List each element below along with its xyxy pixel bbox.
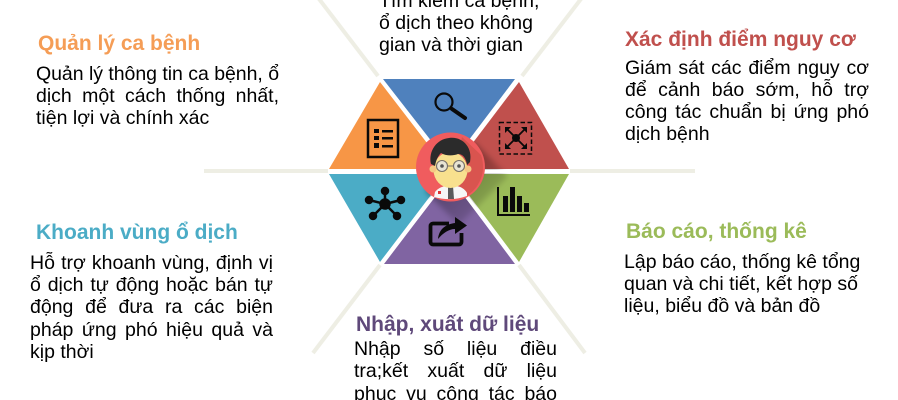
panel: Quản lý ca bệnh: tiện lợi và chính xác	[36, 107, 209, 129]
panel: Xác định điểm nguy cơ: Giám sát các điểm nguy cơ	[625, 57, 869, 79]
panel: Tìm kiếm	[379, 0, 539, 56]
icon: checklist	[368, 120, 398, 157]
panel: Khoanh vùng ổ dịch: ổ dịch tự động hoặc bán tự	[30, 274, 273, 296]
segment: teal	[329, 174, 447, 262]
panel: Tìm kiếm: gian và thời gian	[379, 34, 523, 56]
panel: Xác định điểm nguy cơ: để cảnh báo sớm, hỗ trợ	[625, 79, 869, 101]
panel: Khoanh vùng ổ dịch: Khoanh vùng ổ dịch	[36, 221, 238, 244]
panel: Xác định điểm nguy cơ: dịch bệnh	[625, 123, 710, 145]
panel: Nhập, xuất dữ liệu: tra;kết xuất dữ liệu	[354, 360, 557, 382]
panel: Khoanh vùng ổ dịch: pháp ứng phó hiệu quả và	[30, 319, 273, 341]
icon: magnifier	[436, 94, 465, 118]
panel: Khoanh vùng ổ dịch: động để đưa ra các biện	[30, 296, 273, 318]
segment: blue	[383, 79, 515, 165]
panel: Báo cáo, thống kê: Báo cáo, thống kê	[626, 220, 807, 243]
icon: bar chart	[497, 187, 530, 216]
panel: Nhập, xuất dữ liệu: Nhập số liệu điều	[354, 338, 557, 360]
segment: red	[453, 82, 569, 169]
panel: Nhập, xuất dữ liệu: Nhập, xuất dữ liệu	[356, 313, 539, 336]
separators over shadow	[382, 80, 528, 263]
panel: Xác định điểm nguy cơ: Xác định điểm nguy cơ	[625, 28, 856, 51]
icon: network	[366, 188, 404, 219]
panel: Quản lý ca bệnh: dịch một cách thống nhất,	[36, 85, 279, 107]
circle shadow	[425, 142, 508, 225]
hexagon diagram	[204, 0, 695, 354]
avatar	[416, 132, 485, 202]
panel: Báo cáo, thống kê: quan và chi tiết, kết hợp số	[624, 273, 858, 295]
panel: Báo cáo, thống kê: Lập báo cáo, thống kê tổng	[624, 251, 860, 273]
icon: share	[430, 217, 467, 244]
panel: Nhập, xuất dữ liệu	[354, 313, 557, 400]
segment: purple	[384, 177, 515, 264]
panel: Khoanh vùng ổ dịch: kịp thời	[30, 341, 94, 363]
panel: Xác định điểm nguy cơ	[625, 28, 869, 145]
panel: Tìm kiếm: ổ dịch theo không	[379, 12, 533, 34]
panel: Báo cáo, thống kê	[624, 220, 860, 317]
panel: Báo cáo, thống kê: liệu, biểu đồ và bản đồ	[624, 295, 820, 317]
segment: orange	[329, 82, 447, 169]
icon: expand arrows	[500, 122, 532, 154]
panel: Khoanh vùng ổ dịch	[30, 221, 273, 363]
panel: Xác định điểm nguy cơ: công tác chuẩn bị ứng phó	[625, 101, 869, 123]
panel: Quản lý ca bệnh: Quản lý thông tin ca bệnh, ổ	[36, 63, 279, 85]
panel: Quản lý ca bệnh	[36, 32, 279, 129]
segment: green	[453, 174, 569, 262]
panel: Khoanh vùng ổ dịch: Hỗ trợ khoanh vùng, định vị	[30, 252, 273, 274]
panel: Quản lý ca bệnh: Quản lý ca bệnh	[38, 32, 200, 55]
